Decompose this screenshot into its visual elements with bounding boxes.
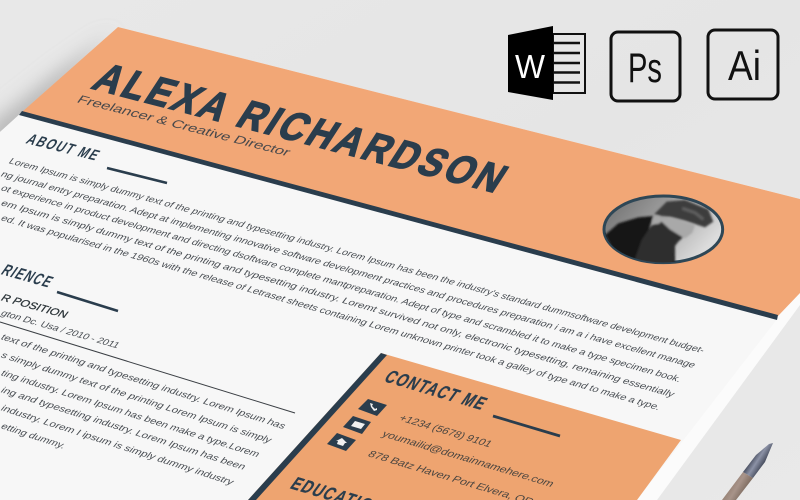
experience paragraph: text of the printing and typesetting industry. Lorem Ipsum has (0, 333, 288, 431)
about me underline (107, 168, 167, 183)
face (660, 218, 695, 238)
icon: word (508, 26, 585, 100)
pen (722, 443, 773, 500)
subtitle: Freelancer & Creative Director (74, 93, 294, 159)
pen tip (743, 443, 773, 478)
about me paragraph: ot experience in product development and directing dsoftware complete mantpreparation. Adept of type and scrambled it to make a type specimen book. (0, 184, 684, 384)
icon: word: W (515, 48, 546, 85)
experience underline (57, 292, 118, 311)
job location and dates: gton Dc. Usa / 2010 - 2011 (0, 309, 122, 351)
job position: R POSITION (0, 293, 70, 321)
hair highlight (682, 208, 703, 219)
experience paragraph (0, 333, 288, 488)
contact panel (248, 353, 681, 500)
about me paragraph: ng journal entry preparation. Adept at implementing innovative software development practices and procedures preparation i am a i have excellent manage (0, 170, 698, 370)
icon: home (327, 433, 356, 451)
beard (633, 222, 683, 263)
about me paragraph: em Ipsum is simply dummy text of the printing and typesetting industry. Loremt survived not only, electronic typesetting, remaining essentially (0, 199, 677, 400)
name title: ALEXA RICHARDSON (85, 56, 519, 202)
contact heading: CONTACT ME (380, 367, 492, 414)
about me paragraph: Lorem Ipsum is simply dummy text of the printing and typesetting industry. Lorem Ipsum has been the industry's standard dummsoftware development budget- (6, 157, 707, 355)
ear (653, 216, 661, 224)
icon: phone (358, 399, 387, 416)
experience paragraph: ing and typesetting industry. Lorem Ipsum has been (0, 386, 248, 472)
experience paragraph: industry. Lorem I ipsum is simply dummy industry (0, 404, 237, 488)
panel side bar (248, 353, 387, 500)
icon: mail (343, 416, 371, 434)
about me heading: ABOUT ME (23, 131, 105, 164)
panel fill (248, 353, 681, 500)
icon: photoshop (611, 32, 680, 101)
page shadow (0, 34, 112, 160)
body (605, 216, 675, 265)
hair (654, 200, 713, 227)
profile photo (604, 196, 723, 265)
icon: photoshop: Ps (628, 44, 662, 91)
contact underline (493, 416, 560, 436)
phone number: +1234 (5678) 9101 (396, 413, 494, 449)
experience rule (0, 322, 295, 413)
email: youmailid@domainnamehere.com (379, 429, 556, 489)
experience paragraph: s simply dummy text of the printing Lorem Ipsum is simply (0, 351, 274, 446)
experience paragraph: etting dummy. (0, 422, 68, 451)
experience paragraph: ting industry. Lorem Ipsum has been make a type.Lorem (0, 369, 262, 459)
pen barrel (722, 472, 753, 500)
header rule (19, 111, 778, 320)
icon: illustrator: Ai (728, 42, 761, 89)
page sheet (0, 112, 778, 500)
header band (22, 27, 800, 316)
about me paragraph: ed. It was popularised in the 1960s with the release of Letraset sheets containing Lorem unknown printer took a galley of type and to make a type. (0, 214, 663, 412)
icon: illustrator (708, 30, 778, 99)
experience heading: RIENCE (0, 261, 58, 291)
